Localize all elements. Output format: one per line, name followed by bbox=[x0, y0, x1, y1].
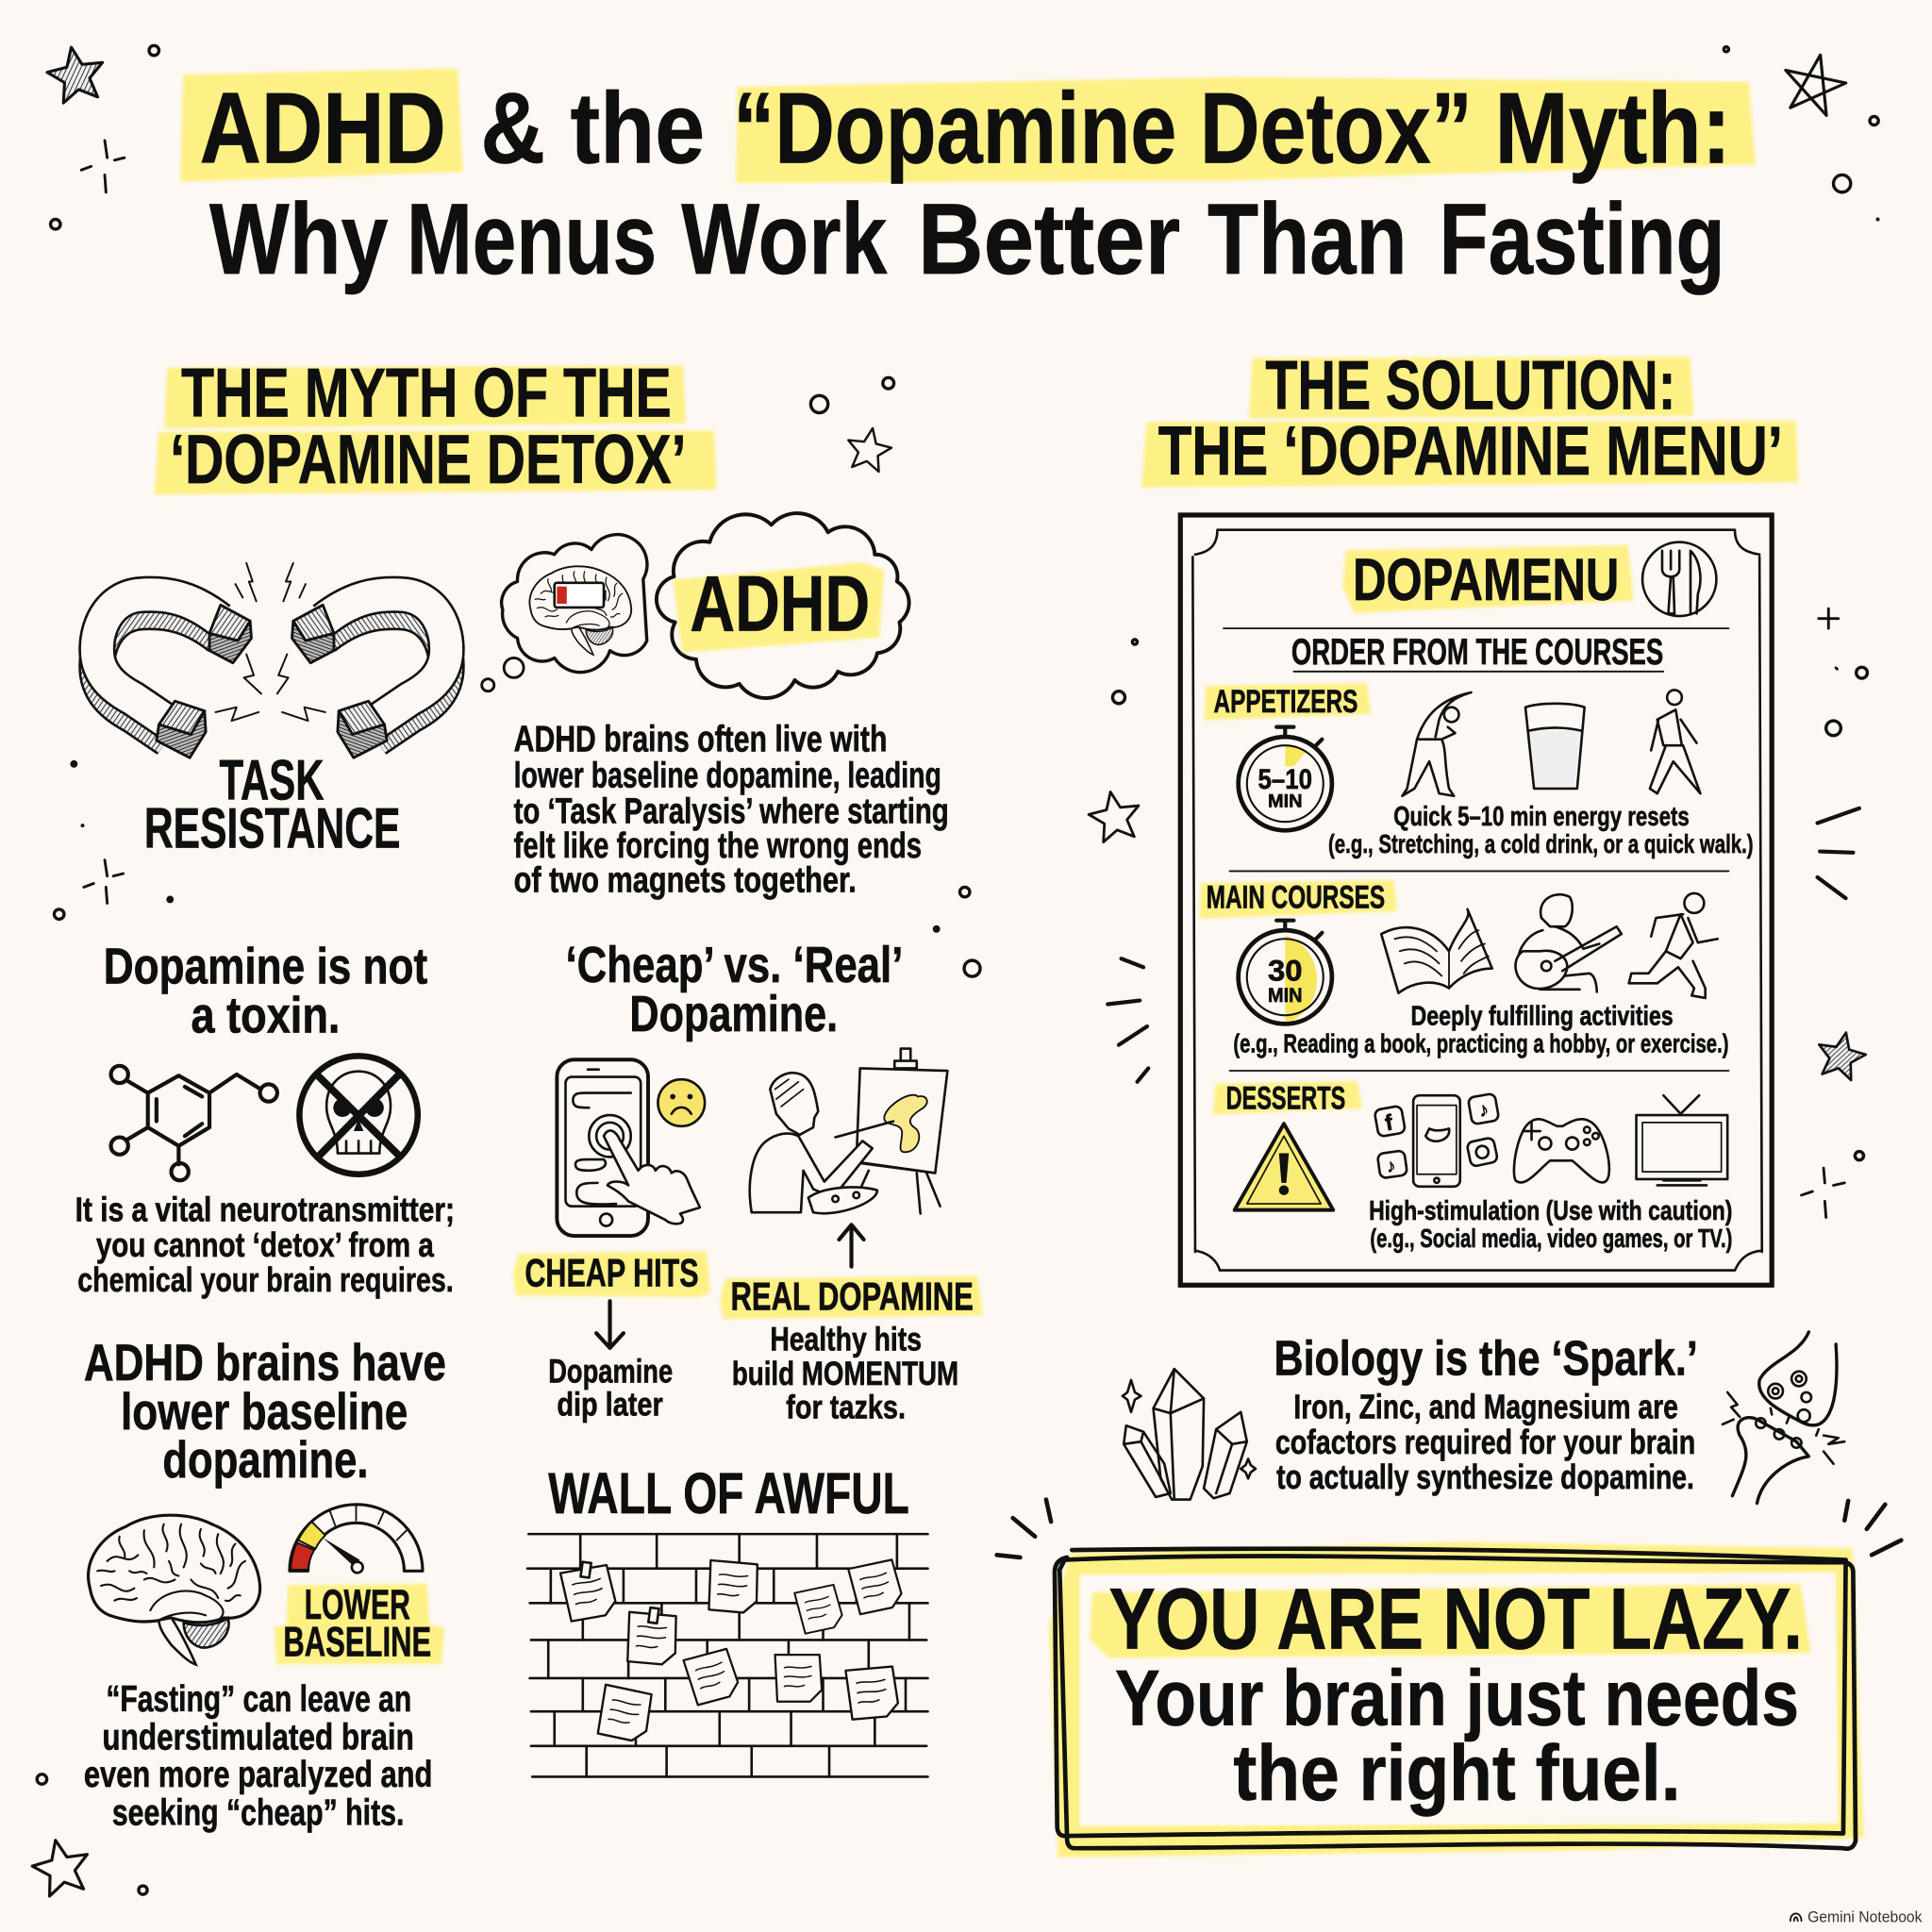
label: lower baseline: LOWER bbox=[305, 1582, 410, 1628]
icon: social media phone: ♪ bbox=[1385, 1156, 1397, 1177]
label: lower baseline bbox=[276, 1582, 442, 1665]
paragraph: vital neurotransmitter: It is a vital neurotransmitter; bbox=[75, 1190, 455, 1228]
icon: painter at easel bbox=[750, 1049, 947, 1214]
icon: open book bbox=[1381, 909, 1492, 993]
title: Than bbox=[1208, 182, 1407, 295]
heading: the solution bbox=[1143, 348, 1796, 490]
text: healthy hits: for tazks. bbox=[786, 1389, 906, 1425]
paragraph: vital neurotransmitter bbox=[75, 1190, 455, 1299]
left magnet bbox=[97, 594, 251, 758]
title: Fasting bbox=[1440, 182, 1725, 295]
heading and text: biology is the spark bbox=[1274, 1332, 1698, 1496]
paragraph: ADHD brains: of two magnets together. bbox=[514, 861, 857, 901]
battery low bbox=[555, 583, 607, 608]
text: deeply fulfilling bbox=[1233, 1002, 1728, 1058]
text: high-stimulation: High-stimulation (Use with caution) bbox=[1369, 1196, 1732, 1226]
icon: big thought cloud with ADHD bbox=[657, 513, 909, 698]
panel: dopamenu bbox=[1180, 515, 1772, 1285]
icon: warning triangle bbox=[1235, 1124, 1333, 1210]
text: healthy hits: Healthy hits bbox=[770, 1322, 922, 1358]
text: quick energy resets: Quick 5–10 min energy resets bbox=[1393, 802, 1690, 832]
label: task resistance bbox=[144, 749, 400, 860]
title: Menus bbox=[407, 182, 657, 295]
icon: social media phone bbox=[1374, 1093, 1499, 1187]
icon: phone with tapping hand bbox=[557, 1059, 700, 1236]
heading: ADHD brains have lower baseline bbox=[84, 1333, 446, 1489]
right magnet bbox=[292, 594, 446, 758]
callout: you are not lazy: Your brain just needs bbox=[1115, 1654, 1799, 1742]
heading: cheap vs real: Dopamine. bbox=[629, 987, 838, 1042]
heading and text: biology is the spark: cofactors required for your brain bbox=[1275, 1423, 1695, 1461]
icon: running figure bbox=[1629, 893, 1718, 998]
heading: the solution: THE ‘DOPAMINE MENU’ bbox=[1158, 413, 1783, 490]
icon: 30 min timer: MIN bbox=[1268, 985, 1303, 1007]
icon: 5-10 min timer bbox=[1239, 727, 1332, 830]
section: desserts: DESSERTS bbox=[1226, 1081, 1345, 1117]
lightning sparks bbox=[216, 563, 325, 721]
heading: cheap vs real: ‘Cheap’ vs. ‘Real’ bbox=[566, 938, 903, 993]
paragraph: fasting bbox=[84, 1679, 432, 1833]
callout: you are not lazy bbox=[1051, 1544, 1862, 1856]
text: dopamine dip later bbox=[548, 1353, 673, 1424]
title: ADHD bbox=[200, 71, 446, 184]
decorative sparkles and rays bbox=[81, 141, 1859, 1217]
icon: small thought cloud with brain and battery bbox=[482, 535, 647, 691]
icon: television bbox=[1637, 1095, 1727, 1185]
label: task resistance: RESISTANCE bbox=[144, 797, 400, 860]
text: quick energy resets bbox=[1328, 802, 1754, 858]
icon: social media phone: ♪ bbox=[1477, 1099, 1491, 1122]
text: deeply fulfilling: (e.g., Reading a book, practicing a hobby, or exercise.) bbox=[1233, 1028, 1728, 1058]
paragraph: ADHD brains: lower baseline dopamine, leading bbox=[514, 757, 941, 796]
section: main courses: MAIN COURSES bbox=[1207, 880, 1385, 916]
paragraph: fasting: understimulated brain bbox=[102, 1718, 414, 1758]
icon: crossed-out skull bbox=[299, 1056, 418, 1174]
heading: dopamine is not a toxin bbox=[104, 939, 427, 1044]
icon: big thought cloud with ADHD: ADHD bbox=[690, 559, 870, 648]
heading and text: biology is the spark: Iron, Zinc, and Magnesium are bbox=[1293, 1387, 1678, 1425]
text: high-stimulation bbox=[1369, 1196, 1732, 1253]
text: dopamine dip later: dip later bbox=[557, 1387, 663, 1424]
icon: social media phone: f bbox=[1383, 1109, 1394, 1135]
heading and text: biology is the spark: Biology is the ‘Spark.’ bbox=[1274, 1332, 1698, 1387]
watermark: Gemini Notebook bbox=[1807, 1908, 1923, 1926]
heading: order from the courses: ORDER FROM THE COURSES bbox=[1291, 632, 1663, 673]
callout: you are not lazy: the right fuel. bbox=[1233, 1728, 1681, 1817]
text: healthy hits: build MOMENTUM bbox=[732, 1356, 958, 1392]
heading: the myth: ‘DOPAMINE DETOX’ bbox=[170, 422, 687, 498]
heading: the myth bbox=[157, 355, 715, 498]
title: & the bbox=[480, 71, 705, 184]
burst lines around callout bbox=[997, 1500, 1901, 1557]
icon: 5-10 min timer: 5–10 bbox=[1258, 764, 1312, 795]
paragraph: fasting: even more paralyzed and bbox=[84, 1755, 432, 1795]
icon: 30 min timer: 30 bbox=[1268, 955, 1303, 988]
arrow down bbox=[596, 1301, 624, 1348]
title bbox=[182, 70, 1754, 295]
paragraph: vital neurotransmitter: chemical your brain requires. bbox=[77, 1260, 454, 1299]
label: task resistance: TASK bbox=[219, 749, 325, 812]
icon: mineral crystals bbox=[1123, 1369, 1256, 1500]
paragraph: ADHD brains: felt like forcing the wrong ends bbox=[514, 826, 922, 866]
paragraph: fasting: “Fasting” can leave an bbox=[106, 1679, 411, 1720]
heading: the solution: THE SOLUTION: bbox=[1265, 348, 1675, 425]
title: Why bbox=[209, 182, 388, 295]
label: cheap hits: CHEAP HITS bbox=[525, 1251, 699, 1295]
heading: the myth: THE MYTH OF THE bbox=[181, 355, 672, 431]
icon: 5-10 min timer: MIN bbox=[1268, 791, 1303, 812]
label: real dopamine: REAL DOPAMINE bbox=[731, 1274, 974, 1318]
paragraph: ADHD brains bbox=[514, 720, 949, 901]
text: high-stimulation: (e.g., Social media, video games, or TV.) bbox=[1370, 1224, 1732, 1253]
heading: ADHD brains have lower baseline: dopamine. bbox=[162, 1430, 369, 1489]
icon: glass of cold drink bbox=[1525, 704, 1585, 789]
icon: stretching figure bbox=[1402, 692, 1472, 796]
icon: dopamine molecule bbox=[111, 1066, 277, 1180]
title: Myth: bbox=[1494, 71, 1731, 184]
section: appetizers: APPETIZERS bbox=[1214, 684, 1357, 720]
text: healthy hits bbox=[732, 1322, 958, 1425]
text: dopamine dip later: Dopamine bbox=[548, 1353, 673, 1390]
sketchy frame bbox=[1055, 1549, 1856, 1849]
text: quick energy resets: (e.g., Stretching, a cold drink, or a quick walk.) bbox=[1328, 829, 1754, 858]
title: Work bbox=[681, 182, 888, 295]
menu frame bbox=[1180, 515, 1772, 1285]
heading: dopamine is not a toxin: a toxin. bbox=[191, 989, 340, 1044]
heading: dopamine is not a toxin: Dopamine is not bbox=[104, 939, 427, 994]
paragraph: ADHD brains: to ‘Task Paralysis’ where starting bbox=[514, 791, 949, 831]
icon: walking figure bbox=[1650, 690, 1700, 793]
title highlights bbox=[182, 70, 1754, 181]
icon: game controller bbox=[1514, 1119, 1609, 1182]
heading: ADHD brains have lower baseline: ADHD brains have bbox=[84, 1333, 446, 1391]
menu title: DOPAMENU bbox=[1353, 547, 1619, 613]
heading and text: biology is the spark: to actually synthesize dopamine. bbox=[1276, 1457, 1694, 1496]
heading: wall of awful: WALL OF AWFUL bbox=[548, 1461, 909, 1526]
text: deeply fulfilling: Deeply fulfilling activities bbox=[1411, 1002, 1674, 1032]
title: Better bbox=[918, 182, 1180, 295]
paragraph: ADHD brains: ADHD brains often live with bbox=[514, 720, 887, 760]
icon: large brain bbox=[89, 1515, 260, 1665]
paragraph: fasting: seeking “cheap” hits. bbox=[112, 1792, 404, 1833]
icon: dopamine gauge bbox=[290, 1505, 423, 1573]
icon: repelling magnets bbox=[97, 563, 446, 758]
illustration: brick wall with sticky notes bbox=[527, 1534, 928, 1776]
heading: cheap vs real bbox=[566, 938, 903, 1042]
arrow up bbox=[839, 1224, 864, 1267]
title: “Dopamine Detox” bbox=[733, 71, 1473, 184]
icon: 30 min timer bbox=[1239, 921, 1332, 1024]
icon: sad face bbox=[658, 1079, 705, 1126]
icon: neuron synapse bbox=[1723, 1332, 1844, 1503]
icon: fork and knife bbox=[1642, 542, 1716, 616]
label: lower baseline: BASELINE bbox=[283, 1619, 431, 1665]
icon: person playing guitar bbox=[1515, 894, 1622, 991]
paragraph: vital neurotransmitter: you cannot ‘detox’ from a bbox=[96, 1225, 434, 1264]
heading: ADHD brains have lower baseline: lower baseline bbox=[121, 1382, 408, 1441]
